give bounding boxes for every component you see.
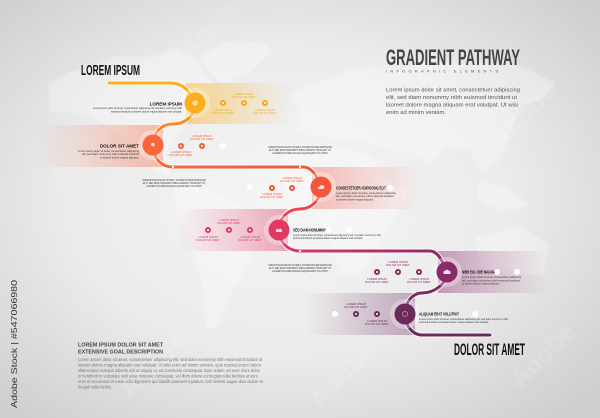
step 1 text: Lorem ipsum dolor sit amet, consectetuer adipiscing elit, sed diam nonummy nibh xyxy=(93,106,182,110)
step 5 labels: DOLOR SIT AMET xyxy=(386,263,410,267)
note below band 2 xyxy=(142,178,206,188)
note below band 4: ELIT, SED DIAM NONUMMY NIBH EUISMOD TINCIDUNT UT xyxy=(269,266,331,270)
step 1 labels xyxy=(211,92,277,115)
step 2 labels: DOLOR SIT AMET xyxy=(190,137,214,141)
step 2 labels: DOLOR SIT AMET xyxy=(169,153,193,157)
white map dots xyxy=(172,143,520,317)
step 6 labels: LOREM IPSUM xyxy=(346,302,366,306)
start heading: LOREM IPSUM xyxy=(81,62,140,79)
step 3 text xyxy=(336,186,396,202)
watermark: Adobe xyxy=(303,336,381,414)
bottom description: LOREM IPSUM DOLOR SIT AMET xyxy=(78,342,164,348)
note below band 4: LOREM IPSUM DOLOR SIT AMET, CONSECTETUER ADIPISCING xyxy=(268,263,332,267)
watermark: Adobe xyxy=(113,326,191,404)
step 2 labels xyxy=(169,134,214,157)
step 4 labels: LOREM IPSUM xyxy=(219,218,239,222)
step 5 text: NIBH EUI. ODE MAGNA xyxy=(462,270,495,274)
step 4 text: SED DIAM NONUMMY xyxy=(293,228,326,232)
step 1 text: euismod tincidunt ut laoreet dolore magna aliquam erat volutpat. xyxy=(111,110,182,114)
step 2 labels: LOREM IPSUM xyxy=(171,150,191,154)
step 4 labels: DOLOR SIT AMET xyxy=(196,238,220,242)
watermark: Adobe xyxy=(503,316,581,394)
title: INFOGRAPHIC ELEMENTS xyxy=(386,68,498,74)
step 2 text: Lorem ipsum dolor sit amet, consectetuer adipiscing xyxy=(78,149,139,153)
pathway xyxy=(109,83,490,335)
node 2 xyxy=(138,130,168,160)
bottom description: feugait nulla facilisi. xyxy=(78,384,112,390)
step 6 labels xyxy=(344,302,389,326)
step 3 labels xyxy=(260,176,304,199)
band 5 xyxy=(438,251,548,293)
node 1 xyxy=(180,88,210,118)
step 3 labels: LOREM IPSUM xyxy=(262,192,282,196)
note below band 2: ELIT, SED DIAM NONUMMY NIBH EUISMOD TINCIDUNT UT xyxy=(143,181,205,185)
step 6 labels: LOREM IPSUM xyxy=(367,319,387,323)
step 4 text: euismod tincidunt ut laoreet dolore magna aliquam erat volutpat. xyxy=(293,236,363,240)
step 5 labels: DOLOR SIT AMET xyxy=(407,280,431,284)
intro text: enim ad minim veniam. xyxy=(386,110,446,116)
step 2 text: DOLOR SIT AMET xyxy=(100,144,139,148)
step 2 text xyxy=(78,144,139,160)
step 6 text: euismod tincidunt ut laoreet dolore magna aliquam erat volutpat. xyxy=(419,320,489,324)
bottom description: EXTENSIVE GOAL DESCRIPTION xyxy=(78,350,163,356)
step 3 labels: DOLOR SIT AMET xyxy=(260,195,284,199)
note above band 3 xyxy=(268,145,332,155)
step 1 labels: DOLOR SIT AMET xyxy=(253,111,277,115)
band 2 xyxy=(38,125,163,167)
step 3 labels: LOREM IPSUM xyxy=(282,176,302,180)
step 5 labels: DOLOR SIT AMET xyxy=(365,280,389,284)
step 6 text xyxy=(419,312,508,324)
step 3 text: CONSECTETUER ADIPISCING ELIT xyxy=(336,186,386,190)
bottom description xyxy=(78,342,264,390)
step 3 labels: DOLOR SIT AMET xyxy=(280,179,304,183)
step 1 text xyxy=(93,102,182,114)
step 3 text: Lorem ipsum dolor sit amet, consectetuer adipiscing xyxy=(336,191,396,195)
end heading: DOLOR SIT AMET xyxy=(454,341,525,359)
step 1 labels: DOLOR SIT AMET xyxy=(211,111,235,115)
step 4 text xyxy=(293,228,381,240)
step 1 labels: LOREM IPSUM xyxy=(234,92,254,96)
bottom description: ullamcorper suscipit lobortis nisl ut aliquip ex ea commodo consequat. Duis autem vel eum iriure dolor xyxy=(78,368,261,373)
note below band 2: LOREM IPSUM DOLOR SIT AMET, CONSECTETUER ADIPISCING xyxy=(142,178,206,182)
stock id: Adobe Stock | #547066980 xyxy=(10,279,19,408)
bottom description: eros et accumsan et iusto odio dignissim qui blandit praesent luptatum zzril delenit augue duis dolore te xyxy=(78,379,264,384)
node 6 xyxy=(390,299,420,329)
step 4 labels: LOREM IPSUM xyxy=(198,235,218,239)
step 6 text: Lorem ipsum dolor sit amet, consectetuer adipiscing elit, sed diam nonummy nibh xyxy=(419,317,508,321)
node 4 xyxy=(264,215,294,245)
title xyxy=(386,45,520,74)
step 4 labels xyxy=(196,218,262,242)
step 5 text: Lorem ipsum dolor sit amet, consectetuer adipiscing xyxy=(462,275,521,279)
step 5 labels xyxy=(365,260,431,284)
band 4 xyxy=(178,209,288,251)
step 3 text: elit, sed diam nonummy nibh euismod tincidunt xyxy=(336,194,394,198)
step 5 labels: LOREM IPSUM xyxy=(409,277,429,281)
bottom description: laoreet dolore magna aliquam erat volutpat. Ut wisi enim ad minim veniam, quis nostrud exerci tation xyxy=(78,362,262,368)
band 1 xyxy=(186,83,291,124)
step 6 labels: DOLOR SIT AMET xyxy=(365,322,389,326)
step 4 labels: DOLOR SIT AMET xyxy=(238,238,262,242)
step 2 text: elit, sed diam nonummy nibh euismod tincidunt xyxy=(82,152,139,156)
step 1 labels: LOREM IPSUM xyxy=(213,108,233,112)
note above band 3: LAOREET DOLORE MAGNA ALIQUAM ERAT VOLUTPAT. xyxy=(272,151,328,155)
step 4 labels: LOREM IPSUM xyxy=(240,235,260,239)
step 2 text: ut laoreet dolore magna aliquam. xyxy=(100,156,139,160)
note below band 4: LAOREET DOLORE MAGNA ALIQUAM ERAT VOLUTPAT. xyxy=(272,269,328,273)
step 6 text: ALIQUAM ERAT VOLUTPAT xyxy=(419,312,459,316)
node 5 xyxy=(432,257,462,287)
step 5 labels: LOREM IPSUM xyxy=(367,277,387,281)
watermark: Adobe xyxy=(43,116,121,194)
step 4 text: Lorem ipsum dolor sit amet, consectetuer adipiscing elit, sed diam nonummy nibh xyxy=(293,233,381,237)
bottom description: in hendrerit in vulputate velit esse molestie consequat, vel illum dolore eu feugiat nulla facilisis at vero xyxy=(78,374,259,378)
step 1 labels: LOREM IPSUM xyxy=(255,108,275,112)
step 5 labels: LOREM IPSUM xyxy=(388,260,408,264)
note above band 3: LOREM IPSUM DOLOR SIT AMET, CONSECTETUER ADIPISCING xyxy=(268,145,332,149)
intro text: laoreet dolore magna aliquam erat volutpat. Ut wisi xyxy=(386,102,518,108)
note above band 3: ELIT, SED DIAM NONUMMY NIBH EUISMOD TINCIDUNT UT xyxy=(269,148,331,152)
step 5 text: elit, sed diam nonummy nibh euismod tincidunt xyxy=(462,278,520,282)
step 3 text: ut laoreet dolore magna aliquam. xyxy=(336,198,374,202)
step 2 labels: LOREM IPSUM xyxy=(192,134,212,138)
band 6 xyxy=(305,293,415,335)
step 1 labels: DOLOR SIT AMET xyxy=(232,95,256,99)
note below band 4 xyxy=(268,263,332,273)
watermark: Adobe xyxy=(483,76,561,154)
intro text: Lorem ipsum dolor sit amet, consectetuer adipiscing xyxy=(386,88,520,94)
step 5 text: ut laoreet dolore magna aliquam. xyxy=(462,282,500,286)
bottom description: Lorem ipsum dolor sit amet, consectetuer adipiscing elit, sed diam nonummy nibh euismod tincidunt ut xyxy=(78,357,263,362)
intro text xyxy=(386,88,520,116)
step 5 text xyxy=(462,270,521,286)
note below band 2: LAOREET DOLORE MAGNA ALIQUAM ERAT VOLUTPAT. xyxy=(146,184,202,188)
step 1 text: LOREM IPSUM xyxy=(150,102,182,106)
band 3 xyxy=(312,167,422,209)
step 4 labels: DOLOR SIT AMET xyxy=(217,221,241,225)
intro text: elit, sed diam nonummy nibh euismod tincidunt ut xyxy=(386,95,517,101)
world map xyxy=(48,42,556,330)
step 6 labels: DOLOR SIT AMET xyxy=(344,305,368,309)
node 3 xyxy=(306,172,336,202)
watermark: Adobe xyxy=(333,136,411,214)
